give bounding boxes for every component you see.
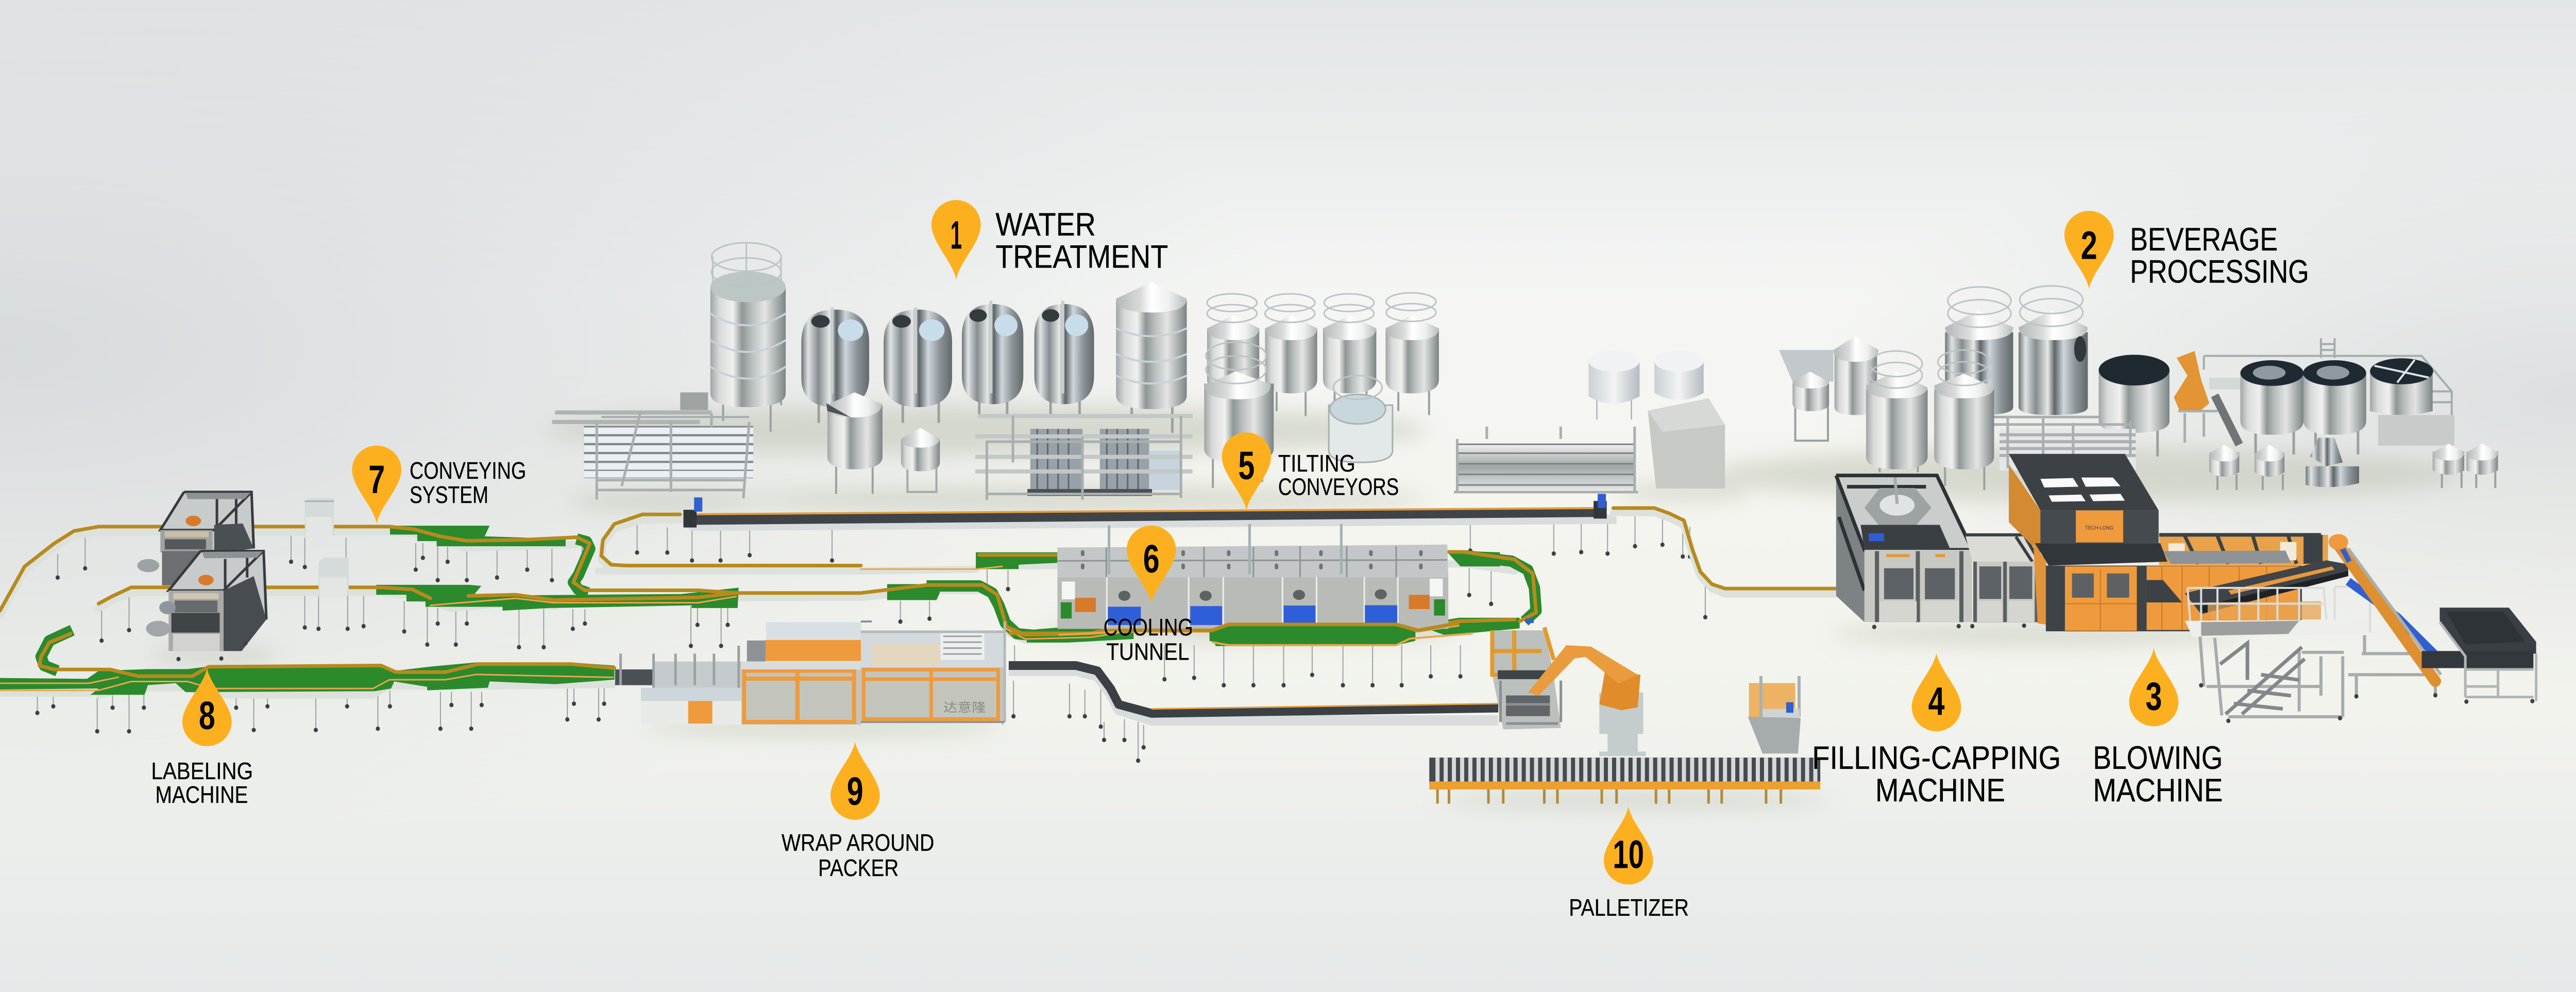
membrane rack 2 (1994, 417, 2136, 470)
panel: cooling tunnel (1009, 524, 1473, 645)
callout pin 5 (1222, 432, 1271, 511)
filler front panel (1865, 550, 1972, 622)
callout pin 3: 3 (2146, 674, 2162, 718)
preform elevator (2329, 534, 2441, 681)
ultrafiltration rack (975, 416, 1193, 500)
callout pin 10: 10 (1613, 832, 1644, 877)
mixing tank 3 (2370, 358, 2433, 415)
callout pin 6: 6 (1143, 536, 1160, 581)
conveyor: case belt to palletizer (1009, 666, 1498, 720)
tall tank with railing (710, 243, 786, 432)
pallet dispenser (1748, 676, 1801, 753)
heading: water treatment (995, 206, 1168, 275)
supports west (37, 522, 832, 731)
tank bank 2 (1265, 294, 1317, 416)
tall process tank 2 (2019, 286, 2088, 415)
tank bank 1 (1207, 294, 1259, 411)
transparent tank (1329, 376, 1393, 462)
callout pin 3 (2129, 648, 2178, 726)
service platform with mixing tanks (2204, 338, 2454, 446)
heat exchanger rack (1454, 427, 1638, 492)
blue drain panels (1108, 605, 1397, 625)
heading: filling-capping machine (1812, 739, 2061, 808)
panel: filling capping machine (1836, 476, 2039, 627)
conveying system supports (37, 512, 1705, 761)
tunnel front conveyor repeat (1009, 623, 1473, 645)
flat mixing panel (1779, 350, 1834, 381)
tunnel fans (1061, 579, 1445, 618)
blower tower with window roof (2009, 454, 2159, 554)
grey service box (1648, 398, 1725, 489)
label: cooling tunnel: TUNNEL (1106, 638, 1189, 665)
filler casters (1874, 626, 2024, 627)
label: conveying system: CONVEYING (410, 457, 526, 484)
heading: filling-capping machine: FILLING-CAPPING (1812, 739, 2061, 776)
labeler 2 (146, 550, 266, 659)
supports east (901, 512, 1705, 761)
label: cooling tunnel: COOLING (1104, 614, 1193, 641)
access scaffold (2185, 586, 2435, 721)
conveyor: tilting dark chain belt (680, 494, 1617, 531)
label: tilting conveyors: TILTING (1278, 450, 1355, 477)
tunnel posts with blue drives (1109, 524, 1341, 574)
pressure vessel 3 (962, 300, 1023, 415)
packer outfeed section (861, 621, 1005, 722)
callout pin 5: 5 (1238, 444, 1255, 488)
label: conveying system: SYSTEM (410, 481, 488, 508)
tunnel body (1057, 577, 1448, 629)
panel: water treatment equipment (552, 243, 1439, 500)
pressure vessel 4 (1035, 300, 1094, 415)
panel: auxiliary tanks and rack (1454, 350, 1725, 492)
tunnel roof panels (1057, 545, 1448, 577)
bottle case divider frame (1491, 618, 1561, 730)
label: labeling machine: LABELING (151, 758, 253, 784)
homogenizer pump (2306, 438, 2359, 487)
callout pin 8: 8 (199, 693, 215, 737)
cone-roof storage tank (1116, 282, 1187, 433)
tunnel bay lines and windows (1107, 577, 1398, 627)
heading: blowing machine: MACHINE (2093, 772, 2223, 808)
heading: beverage processing: BEVERAGE (2130, 221, 2278, 258)
callout pin 4 (1912, 653, 1961, 731)
rear cone tank (1834, 336, 1878, 415)
labeler 1 (138, 492, 253, 585)
rear orange enclosure (2159, 535, 2328, 565)
orange lower rails (0, 566, 1459, 691)
callout pin 1 (931, 200, 981, 280)
label: labeling machine (151, 758, 253, 808)
conveyor: bottle tracks (0, 508, 1856, 691)
tank bank 3 (1323, 294, 1376, 411)
small buffer tank 3 (2433, 444, 2464, 488)
mixing tank 1 (2240, 360, 2303, 455)
label: wrap around packer: PACKER (818, 854, 899, 881)
open tank with dark interior (2099, 355, 2170, 457)
callout pin 9 (831, 742, 880, 820)
callout pin 6 (1127, 526, 1176, 603)
small buffer tank 1 (2209, 445, 2239, 490)
conveyor: green accumulation tables (0, 526, 1536, 695)
front process tank 2 (1934, 350, 1994, 490)
label: wrap around packer: WRAP AROUND (782, 829, 934, 856)
heading: filling-capping machine: MACHINE (1875, 772, 2005, 808)
callout pin 7: 7 (368, 458, 385, 502)
preform chute (2185, 560, 2348, 614)
callout pin 7 (352, 446, 401, 524)
control box (680, 392, 708, 410)
control cabinet lower (318, 558, 349, 598)
heading: blowing machine: BLOWING (2093, 739, 2223, 776)
label: palletizer: PALLETIZER (1569, 894, 1689, 921)
label: wrap around packer (782, 829, 934, 881)
panel: palletizer (1429, 618, 1820, 803)
large front tank (1204, 342, 1274, 488)
robot arm (1528, 645, 1646, 756)
heading: blowing machine (2093, 739, 2223, 808)
callout pin 8 (182, 668, 232, 746)
callout pin 1: 1 (951, 213, 962, 257)
preform hopper (2422, 608, 2536, 702)
label: labeling machine: MACHINE (155, 781, 248, 808)
pressure vessel 1 (801, 308, 869, 423)
callout pin 10 (1604, 806, 1653, 884)
support feet east (901, 545, 1705, 761)
label: cooling tunnel (1104, 614, 1193, 665)
heading: beverage processing (2130, 221, 2309, 290)
capper section (1965, 535, 2039, 623)
callout pin 9: 9 (847, 769, 863, 813)
panel: wrap around packer (615, 621, 1005, 725)
tall process tank 1 (1945, 287, 2013, 415)
gold top rails (0, 508, 1856, 676)
front process tank 1 (1866, 351, 1928, 472)
orange robot (2174, 351, 2217, 443)
blower tower with window roof: TECH-LONG (2085, 526, 2113, 531)
front micro filter (901, 428, 940, 492)
white water tower 1 (1589, 350, 1639, 419)
callout pin 4: 4 (1928, 679, 1945, 724)
pressure vessel 2 (884, 308, 952, 423)
panel: beverage processing equipment (1779, 286, 2498, 490)
callout pin 2: 2 (2081, 223, 2097, 267)
tank bank 4 (1385, 293, 1439, 415)
panel: blowing machine (2009, 454, 2536, 721)
packer infeed (615, 646, 741, 725)
white water tower 2 (1654, 350, 1704, 400)
heading: water treatment: WATER (995, 206, 1096, 242)
packer mid section (741, 622, 861, 725)
pallet roller conveyor (1429, 758, 1820, 803)
heading: beverage processing: PROCESSING (2130, 254, 2309, 290)
heading: water treatment: TREATMENT (995, 239, 1168, 275)
small buffer tank 4 (2466, 444, 2498, 488)
membrane rack (552, 412, 753, 499)
label: tilting conveyors (1278, 450, 1399, 500)
panel: labeling machines (138, 492, 349, 659)
filler housing (1836, 476, 1972, 622)
small buffer tank 2 (2255, 445, 2284, 490)
packer brand mark in Chinese: 达意隆 (943, 700, 986, 714)
support feet west (37, 552, 832, 731)
control cabinet upper (305, 498, 334, 538)
conveyor: track shadow rails (0, 513, 1856, 695)
label: tilting conveyors: CONVEYORS (1278, 473, 1399, 500)
front small cone tank (826, 392, 883, 494)
blower base (2033, 543, 2302, 631)
callout pin 2 (2064, 211, 2114, 289)
mixing tank 2 (2303, 360, 2366, 455)
small batching tank (1792, 372, 1829, 441)
label: conveying system (410, 457, 526, 508)
